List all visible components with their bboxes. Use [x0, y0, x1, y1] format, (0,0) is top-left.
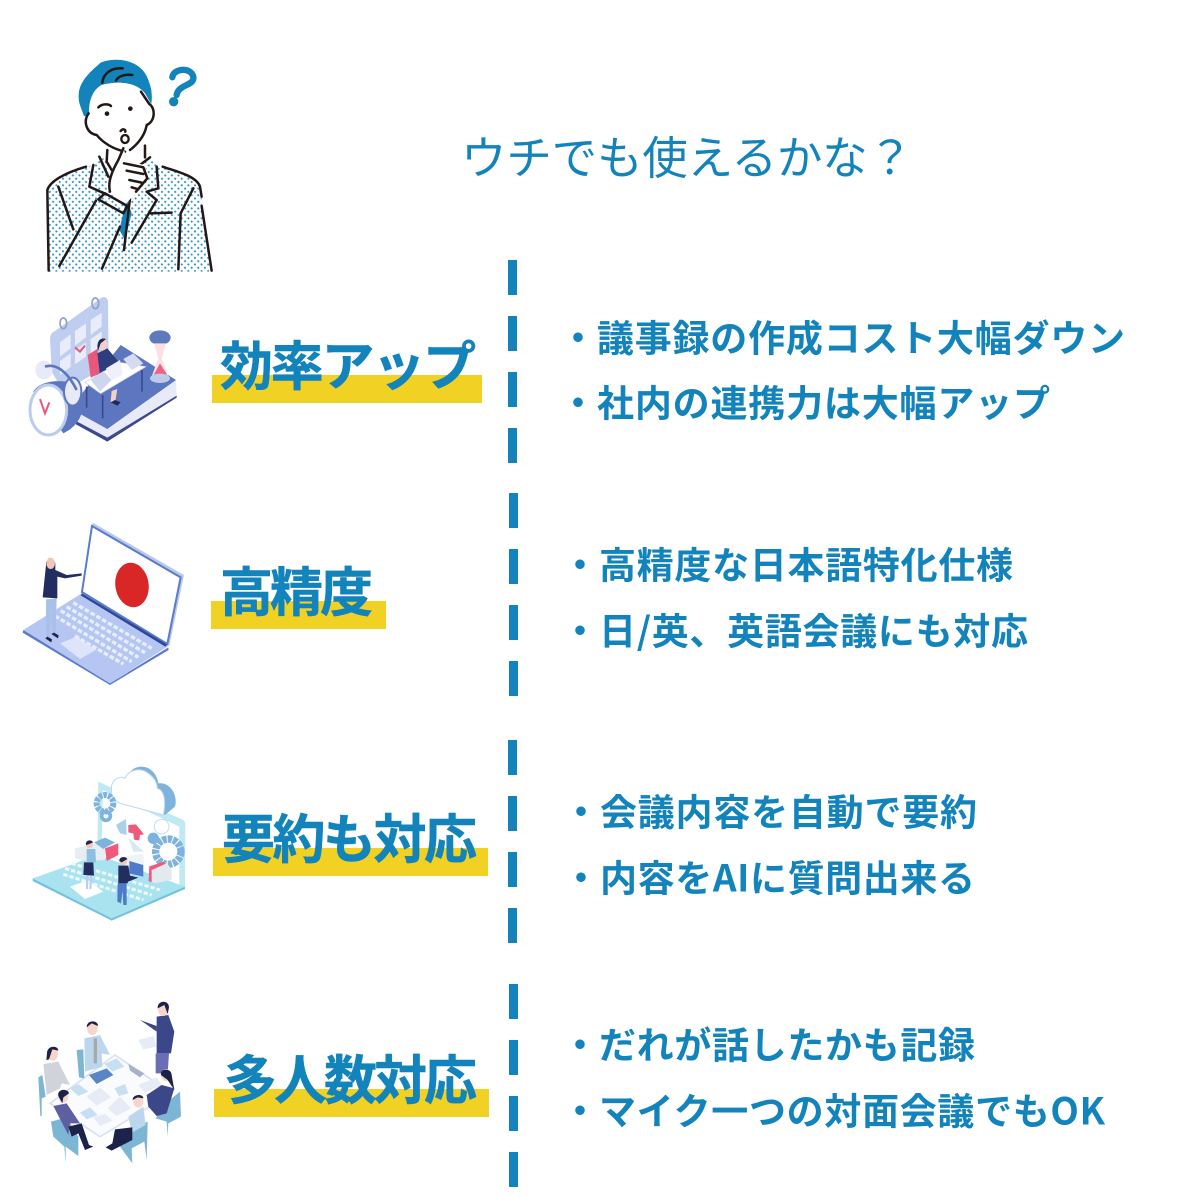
text block: bullets: ・ — [562, 1015, 598, 1069]
panel: multi-speaker — [38, 1002, 1106, 1163]
text block: bullets: 議事録の作成コスト大幅ダウン — [597, 308, 1125, 362]
icon: desk on book with calendar, clock and hourglass — [30, 297, 177, 442]
icon: meeting around a table — [38, 1002, 181, 1163]
highlight bar — [212, 375, 482, 403]
text block: bullets — [560, 308, 1125, 428]
icon: thinking man with question mark — [47, 60, 212, 272]
text block: bullets: だれが話したかも記録 — [599, 1016, 975, 1070]
text block: bullets: ・ — [562, 782, 600, 836]
text block: bullets: ・ — [562, 601, 598, 655]
text block: bullets: 内容をAIに質問出来る — [600, 848, 975, 902]
title: ウチでも使えるかな？ — [461, 122, 913, 188]
text block: bullets — [562, 535, 1028, 656]
text block: bullets: 高精度な日本語特化仕様 — [599, 536, 1013, 590]
text block: bullets: ・ — [562, 848, 600, 902]
text block: bullets: マイク一つの対面会議でもOK — [599, 1082, 1106, 1136]
text block: bullets: ・ — [562, 1081, 598, 1135]
text block: bullets: 日/英、英語会議にも対応 — [599, 602, 1028, 656]
heading: 要約も対応 — [222, 798, 477, 874]
heading: 多人数対応 — [224, 1039, 477, 1115]
icon: laptop with Japanese flag and presenter — [23, 523, 184, 685]
panel: accuracy — [23, 523, 1028, 685]
text block: bullets: 会議内容を自動で要約 — [600, 782, 977, 836]
text block: bullets: 社内の連携力は大幅アップ — [597, 374, 1050, 428]
text block: bullets: ・ — [560, 308, 596, 362]
heading: 高精度 — [220, 551, 373, 627]
text block: bullets: ・ — [562, 535, 598, 589]
highlight bar — [213, 848, 488, 876]
highlight bar — [211, 601, 386, 629]
icon: cloud, gears and laptop with two people — [33, 767, 185, 921]
panel: efficiency — [30, 297, 1125, 442]
text block: bullets: ・ — [560, 373, 596, 427]
panel: summary — [33, 767, 977, 921]
text block: bullets — [562, 1015, 1106, 1136]
heading: 効率アップ — [220, 325, 476, 401]
dashed divider — [508, 260, 518, 1187]
text block: bullets — [562, 782, 977, 902]
highlight bar — [214, 1089, 489, 1117]
